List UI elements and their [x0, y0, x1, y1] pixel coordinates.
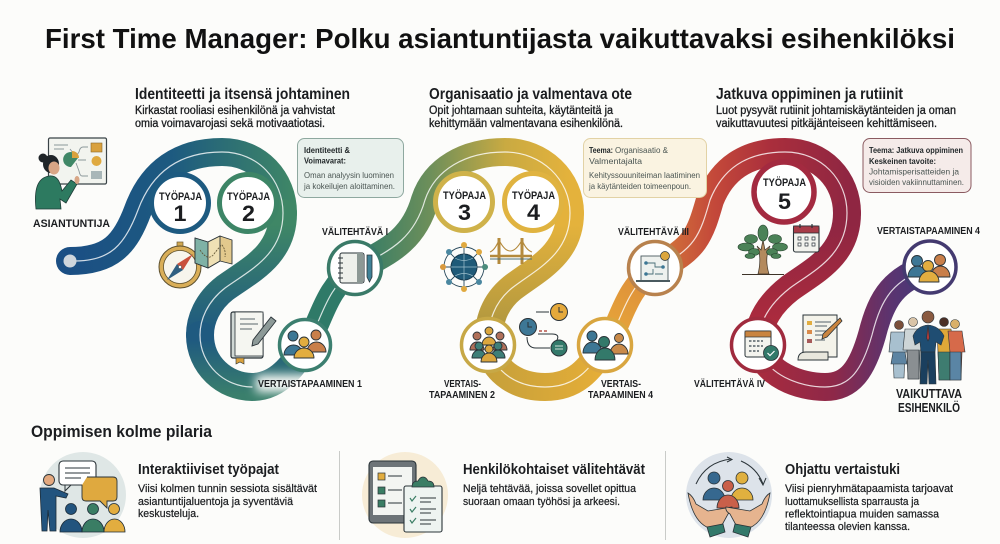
milestone: vertaistapaaminen 1: [280, 320, 330, 370]
label: vertaistapaaminen 2: TAPAAMINEN 2: [429, 390, 495, 401]
workshop 2: TYÖPAJA: [227, 190, 270, 203]
workshop 4: [504, 174, 562, 230]
callout: organisaatio: Kehityssouuniteiman laatiminen: [589, 170, 700, 180]
callout: identiteetti: [298, 138, 404, 198]
workshop 4: TYÖPAJA: [512, 189, 555, 202]
icon: globe network: [440, 242, 488, 292]
heading block: Organisaatio: Opit johtamaan suhteita, käytänteitä ja: [429, 105, 614, 117]
label: välitehtävä IV: VÄLITEHTÄVÄ IV: [694, 377, 765, 390]
heading block: Jatkuva oppiminen: Luot pysyvät rutiinit johtamiskäytänteiden ja oman: [716, 105, 956, 117]
workshop 4: 4: [527, 200, 541, 225]
label: asiantuntija: ASIANTUNTIJA: [33, 218, 110, 230]
text: peer support: Viisi pienryhmätapaamista tarjoavat: [785, 483, 953, 495]
icon: people in hands: [686, 452, 772, 538]
heading block: Jatkuva oppiminen: [716, 86, 956, 130]
workshop 5: 5: [778, 189, 791, 214]
callout: jatkuva: Teema: Jatkuva oppiminen: [869, 145, 963, 155]
icon: map: [195, 236, 232, 268]
callout: organisaatio: Valmentajalta: [589, 156, 642, 166]
workshop 1: TYÖPAJA: [159, 190, 202, 203]
workshop 5: [754, 162, 814, 222]
text: workshops: asiantuntijaluentoja ja syventäviä: [138, 496, 294, 508]
milestone: vertaistapaaminen 4: [578, 318, 632, 372]
milestone: välitehtävä III: [628, 242, 682, 294]
callout: jatkuva: [863, 138, 971, 192]
callout: identiteetti: Oman analyysin luominen: [304, 170, 394, 180]
label: vertaistapaaminen 4 (middle): [588, 379, 653, 401]
text: assignments: suoraan omaan työhösi ja arkeesi.: [463, 496, 620, 508]
callout: organisaatio: Teema:: [589, 145, 613, 155]
workshop 1: 1: [174, 201, 186, 226]
heading block: Jatkuva oppiminen: Jatkuva oppiminen ja rutiinit: [716, 86, 903, 103]
text: peer support: [785, 462, 953, 533]
workshop 2: 2: [242, 201, 255, 226]
callout: jatkuva: visioiden vakiinnuttaminen.: [869, 177, 964, 187]
icon: process flow: [520, 304, 568, 356]
icon: calendar: [794, 224, 819, 252]
callout: organisaatio: Organisaatio &: [615, 145, 668, 155]
milestone: vertaistapaaminen 4 (final): [904, 241, 956, 293]
title: First Time Manager: Polku asiantuntijasta vaikuttavaksi esihenkilöksi: [45, 23, 955, 54]
label: vertaistapaaminen 4 (middle): VERTAIS-: [601, 379, 641, 390]
text: assignments: [463, 462, 645, 508]
milestone: välitehtävä I: [328, 242, 382, 294]
heading block: Organisaatio: kehittymään valmentavana esihenkilönä.: [429, 118, 623, 130]
label: vertaistapaaminen 4 (final): VERTAISTAPAAMINEN 4: [877, 226, 980, 237]
workshop 3: 3: [458, 200, 471, 225]
icon: tablet and clipboard: [362, 452, 448, 538]
workshop 2: [220, 174, 276, 232]
heading block: Organisaatio: Organisaatio ja valmentava ote: [429, 86, 632, 103]
label: vaikuttava esihenkilö: VAIKUTTAVA: [896, 386, 963, 401]
text: assignments: Neljä tehtävää, joissa sovellet opittua: [463, 483, 637, 495]
icon: team of leaders: [889, 311, 965, 384]
workshop 3: [436, 174, 492, 230]
label: vertaistapaaminen 1: VERTAISTAPAAMINEN 1: [258, 379, 362, 390]
callout: identiteetti: Identiteetti &: [304, 145, 350, 155]
heading block: Identiteetti: Identiteetti ja itsensä johtaminen: [135, 86, 350, 103]
icon: document and pen: [798, 315, 842, 360]
callout: identiteetti: Voimavarat:: [304, 156, 346, 166]
pillar 1: interactive workshops: [40, 452, 317, 538]
workshop 3: TYÖPAJA: [443, 189, 486, 202]
label: vaikuttava esihenkilö: [896, 386, 963, 415]
journey path: [70, 152, 930, 392]
text: peer support: reflektointiapua muiden samassa: [785, 508, 940, 520]
path start point: [64, 254, 76, 268]
icon: presenter and audience: [40, 452, 126, 538]
text: assignments: Henkilökohtaiset välitehtävät: [463, 462, 645, 478]
icon: tree: [738, 225, 788, 274]
label: vertaistapaaminen 2: VERTAIS-: [444, 379, 481, 390]
callout: organisaatio: [584, 138, 706, 198]
milestone: välitehtävä IV: [732, 318, 784, 372]
text: workshops: Viisi kolmen tunnin sessiota sisältävät: [138, 483, 317, 495]
icon: notebook and pen: [231, 312, 276, 364]
workshop 1: [152, 174, 208, 232]
pillar 3: guided peer support: [686, 452, 953, 538]
pillar 2: personal assignments: [362, 452, 645, 538]
icon: bridge: [490, 238, 532, 264]
heading block: Identiteetti: Kirkastat rooliasi esihenkilönä ja vahvistat: [135, 105, 336, 117]
icon: compass: [159, 242, 201, 288]
heading block: Organisaatio: [429, 86, 632, 130]
label: välitehtävä III: VÄLITEHTÄVÄ III: [618, 225, 689, 238]
callout: jatkuva: Johtamisperisatteiden ja: [869, 166, 959, 176]
callout: identiteetti: ja kokeilujen aloittaminen.: [303, 181, 395, 191]
label: vaikuttava esihenkilö: ESIHENKILÖ: [898, 400, 960, 415]
icon: expert at board: [35, 138, 106, 209]
heading block: Identiteetti: [135, 86, 350, 130]
label: vertaistapaaminen 2: [429, 379, 495, 401]
heading: pillars: Oppimisen kolme pilaria: [31, 422, 212, 441]
milestone: vertaistapaaminen 2: [462, 318, 514, 372]
heading block: Identiteetti: omia voimavarojasi sekä motivaatiotasi.: [135, 118, 325, 130]
text: workshops: keskusteluja.: [138, 508, 199, 520]
text: peer support: luottamuksellista sparrausta ja: [785, 496, 920, 508]
text: workshops: Interaktiiviset työpajat: [138, 462, 279, 478]
text: workshops: [138, 462, 317, 520]
text: peer support: Ohjattu vertaistuki: [785, 462, 900, 478]
callout: jatkuva: Keskeinen tavoite:: [869, 156, 936, 166]
label: välitehtävä I: VÄLITEHTÄVÄ I: [322, 225, 388, 238]
heading block: Jatkuva oppiminen: vaikuttavuutesi pitkäjänteiseen kehittämiseen.: [716, 118, 937, 130]
workshop 5: TYÖPAJA: [763, 176, 806, 189]
text: peer support: tilanteessa olevien kanssa.: [785, 521, 910, 533]
label: vertaistapaaminen 4 (middle): TAPAAMINEN 4: [588, 390, 653, 401]
callout: organisaatio: ja käytänteiden toimeenpoun.: [588, 181, 691, 191]
